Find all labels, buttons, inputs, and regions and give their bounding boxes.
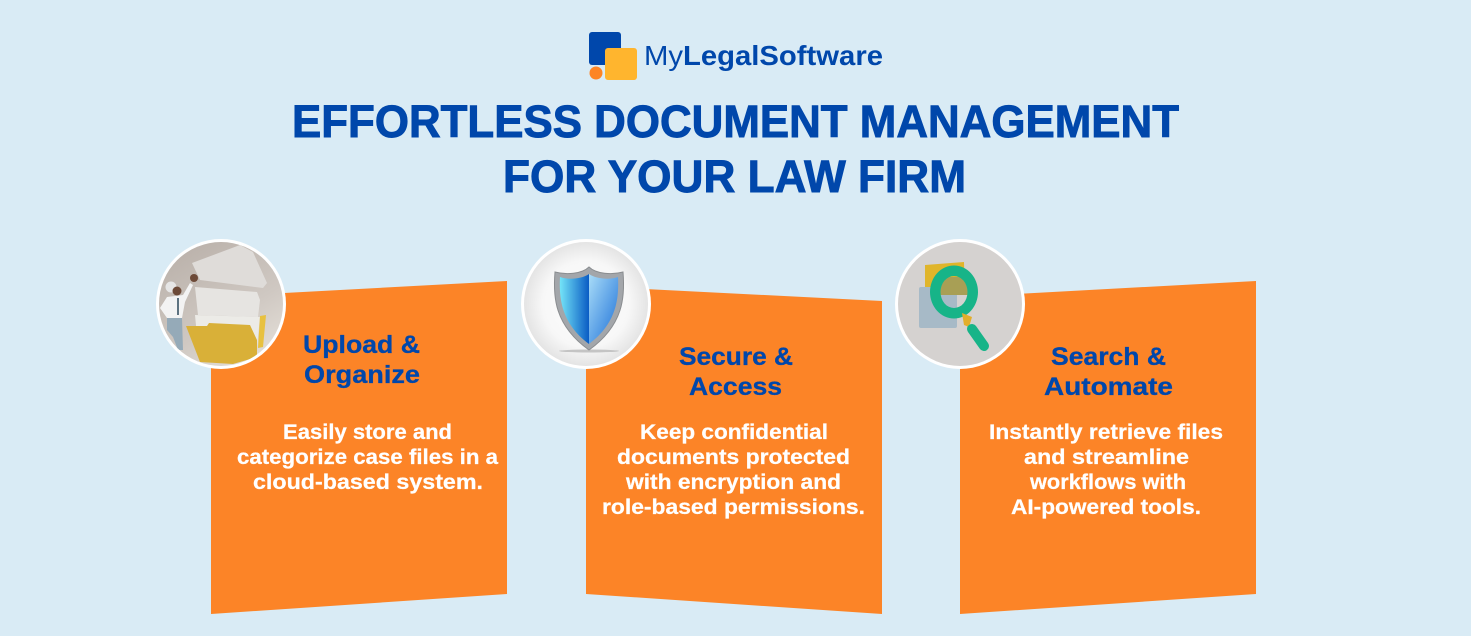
icon: person with folder <box>156 239 286 369</box>
body text: Instantly retrieve files <box>989 421 1223 444</box>
body text: cloud-based system. <box>253 471 483 494</box>
heading: Automate <box>1044 373 1173 401</box>
body text <box>989 421 1223 519</box>
logo <box>589 32 883 80</box>
body text: workflows with <box>1029 471 1186 494</box>
body text: AI-powered tools. <box>1011 496 1201 519</box>
panel: upload and organize <box>211 281 507 614</box>
panel: search and automate <box>960 281 1256 614</box>
logo wordmark: MyLegalSoftware <box>644 40 883 71</box>
title: FOR YOUR LAW FIRM <box>503 151 966 202</box>
icon: magnifying glass <box>895 239 1025 369</box>
heading <box>679 343 793 401</box>
title <box>292 96 1179 202</box>
panel shape <box>211 281 507 614</box>
body text: and streamline <box>1024 446 1189 469</box>
body text: Keep confidential <box>640 421 828 444</box>
icon: shield <box>521 239 651 369</box>
logo mark <box>589 32 637 80</box>
heading <box>303 331 420 389</box>
title: EFFORTLESS DOCUMENT MANAGEMENT <box>292 96 1179 147</box>
body text <box>237 421 498 494</box>
body text <box>602 421 865 519</box>
panel shape <box>960 281 1256 614</box>
body text: role-based permissions. <box>602 496 865 519</box>
body text: categorize case files in a <box>237 446 498 469</box>
heading <box>1044 343 1173 401</box>
body text: documents protected <box>617 446 850 469</box>
panel: secure and access <box>586 286 882 614</box>
heading: Upload & <box>303 331 420 359</box>
body text: Easily store and <box>283 421 452 444</box>
panel shape <box>586 286 882 614</box>
heading: Access <box>689 373 782 401</box>
heading: Search & <box>1051 343 1166 371</box>
heading: Secure & <box>679 343 793 371</box>
body text: with encryption and <box>625 471 841 494</box>
heading: Organize <box>304 361 420 389</box>
